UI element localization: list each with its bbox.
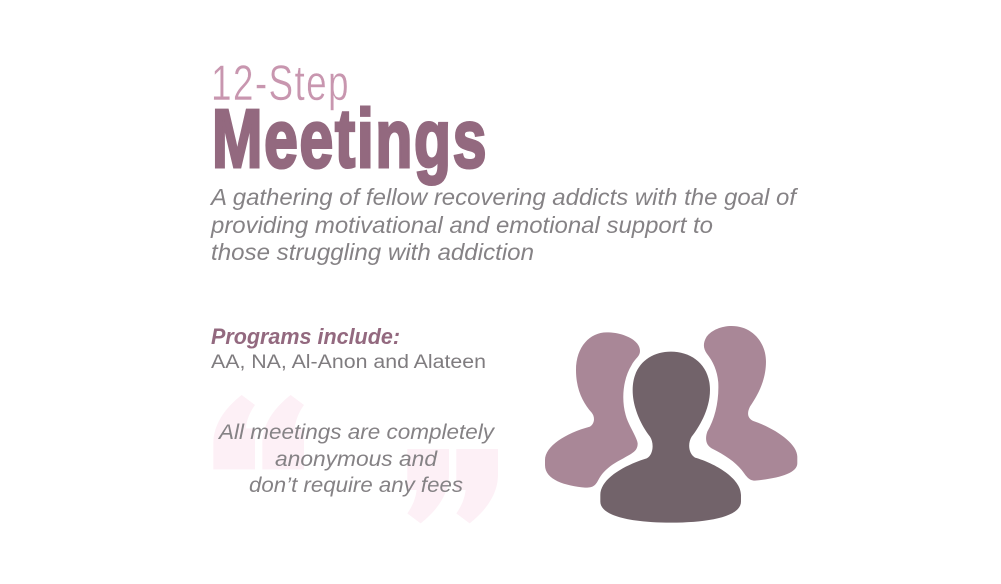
title: [211, 56, 486, 185]
icon: quotation marks background: [213, 395, 498, 523]
person center: [600, 352, 741, 523]
title line: Meetings: Meetings: [212, 93, 486, 185]
person right: [704, 326, 797, 481]
description text: providing motivational and emotional support to: [210, 212, 713, 238]
description text: A gathering of fellow recovering addicts with the goal of: [209, 184, 799, 210]
quote text: [217, 421, 496, 497]
quote text: All meetings are completely: [217, 421, 496, 444]
programs heading: Programs include:: [211, 324, 400, 349]
title line: 12-Step: 12-Step: [211, 56, 349, 111]
quote text: don’t require any fees: [249, 474, 464, 497]
programs list: [211, 324, 486, 373]
person left: [545, 332, 640, 488]
quote text: anonymous and: [275, 448, 438, 471]
programs names: AA, NA, Al-Anon and Alateen: [211, 352, 486, 373]
description text: [209, 184, 799, 265]
description text: those struggling with addiction: [211, 239, 534, 265]
icon: group of people: [545, 326, 797, 523]
